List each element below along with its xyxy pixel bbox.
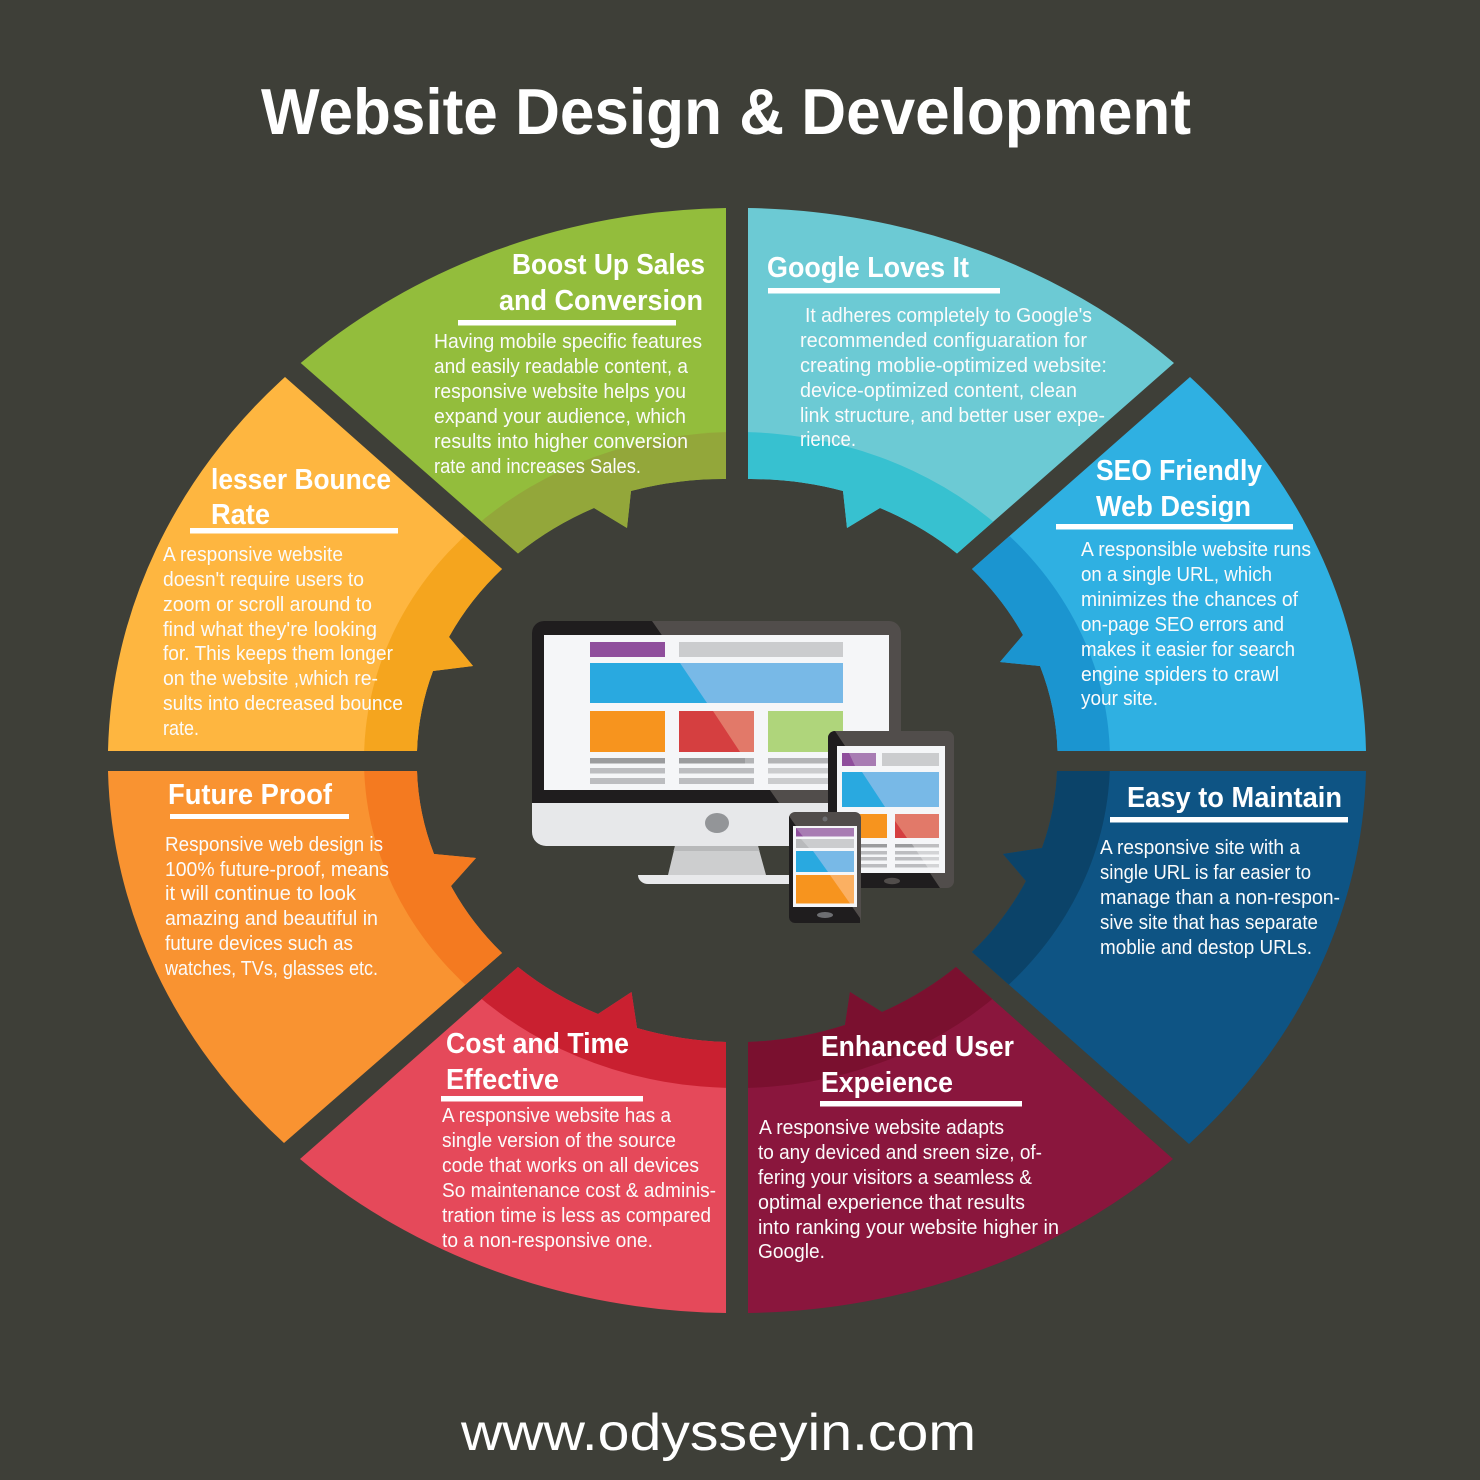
heading rule bbox=[458, 320, 676, 326]
body text: find what they're looking bbox=[163, 619, 377, 641]
body text bbox=[800, 305, 1107, 451]
body text: results into higher conversion bbox=[434, 431, 688, 453]
body text: 100% future-proof, means bbox=[165, 859, 389, 881]
body text: optimal experience that results bbox=[758, 1192, 1025, 1214]
body text: on-page SEO errors and bbox=[1081, 614, 1284, 636]
body text bbox=[758, 1117, 1059, 1263]
body text: amazing and beautiful in bbox=[165, 908, 378, 930]
icon: desktop monitor bbox=[532, 621, 901, 884]
heading rule bbox=[820, 1101, 1022, 1106]
body text: it will continue to look bbox=[165, 883, 357, 905]
heading bbox=[499, 249, 705, 317]
heading: Expeience bbox=[821, 1067, 953, 1099]
body text: It adheres completely to Google's bbox=[805, 305, 1092, 327]
body text: A responsive website has a bbox=[442, 1105, 672, 1127]
heading bbox=[821, 1031, 1014, 1099]
segment shape: blue bbox=[972, 377, 1366, 751]
body text: creating moblie-optimized website: bbox=[800, 355, 1107, 377]
body text: makes it easier for search bbox=[1081, 639, 1295, 661]
heading rule bbox=[1056, 524, 1293, 530]
heading rule bbox=[190, 528, 398, 534]
body text: A responsive site with a bbox=[1100, 837, 1301, 859]
body text: A responsible website runs bbox=[1081, 539, 1311, 561]
footer url: www.odysseyin.com bbox=[460, 1404, 976, 1462]
heading: Enhanced User bbox=[821, 1031, 1014, 1063]
body text bbox=[442, 1105, 716, 1252]
heading bbox=[211, 464, 391, 531]
body text: rience. bbox=[800, 429, 856, 451]
heading: Google Loves It bbox=[767, 252, 969, 284]
heading: Web Design bbox=[1096, 491, 1251, 523]
body text: your site. bbox=[1081, 688, 1158, 710]
body text: single URL is far easier to bbox=[1100, 862, 1311, 884]
segment shape: red bbox=[300, 967, 726, 1313]
body text: sive site that has separate bbox=[1100, 912, 1318, 934]
heading: SEO Friendly bbox=[1096, 455, 1262, 487]
heading bbox=[1096, 455, 1262, 523]
body text: moblie and destop URLs. bbox=[1100, 937, 1312, 959]
body text: expand your audience, which bbox=[434, 406, 686, 428]
icon: phone bbox=[789, 812, 861, 923]
inner darker band bbox=[482, 967, 726, 1088]
panel: seo friendly web design bbox=[972, 377, 1366, 751]
segment shape: navy bbox=[972, 771, 1366, 1144]
heading: Future Proof bbox=[168, 779, 332, 811]
panel: boost up sales and conversion bbox=[300, 208, 726, 554]
body text: A responsive website adapts bbox=[759, 1117, 1004, 1139]
panel: lesser bounce rate bbox=[108, 377, 502, 751]
body text: doesn't require users to bbox=[163, 569, 364, 591]
body text: recommended configuaration for bbox=[800, 330, 1087, 352]
body text: rate. bbox=[163, 718, 199, 740]
segment shape: green bbox=[301, 208, 726, 554]
body text: tration time is less as compared bbox=[442, 1205, 711, 1227]
body text: rate and increases Sales. bbox=[434, 456, 641, 478]
body text: sults into decreased bounce bbox=[163, 693, 403, 715]
body text bbox=[163, 544, 403, 740]
body text: watches, TVs, glasses etc. bbox=[164, 958, 378, 980]
panel: cost and time effective bbox=[300, 967, 726, 1313]
body text: A responsive website bbox=[163, 544, 343, 566]
body text: So maintenance cost & adminis- bbox=[442, 1180, 716, 1202]
heading rule bbox=[1110, 817, 1348, 822]
body text bbox=[434, 331, 702, 478]
segment shape: maroon bbox=[748, 967, 1173, 1313]
heading: Effective bbox=[446, 1064, 559, 1096]
icon: tablet bbox=[828, 731, 954, 888]
heading: Easy to Maintain bbox=[1127, 782, 1342, 814]
body text: to any deviced and sreen size, of- bbox=[758, 1142, 1042, 1164]
body text: for. This keeps them longer bbox=[163, 643, 393, 665]
heading: lesser Bounce bbox=[211, 464, 391, 496]
body text: responsive website helps you bbox=[434, 381, 686, 403]
body text: on a single URL, which bbox=[1081, 564, 1272, 586]
body text: minimizes the chances of bbox=[1081, 589, 1298, 611]
heading bbox=[446, 1028, 629, 1096]
segment shape: teal bbox=[748, 208, 1174, 554]
body text: engine spiders to crawl bbox=[1081, 664, 1279, 686]
body text: manage than a non-respon- bbox=[1100, 887, 1340, 909]
inner darker band bbox=[748, 967, 992, 1088]
heading: Boost Up Sales bbox=[512, 249, 705, 281]
heading: and Conversion bbox=[499, 285, 703, 317]
body text: single version of the source bbox=[442, 1130, 676, 1152]
inner darker band bbox=[364, 771, 502, 985]
body text bbox=[164, 834, 389, 980]
body text: fering your visitors a seamless & bbox=[758, 1167, 1033, 1189]
heading rule bbox=[170, 814, 349, 819]
heading: Cost and Time bbox=[446, 1028, 629, 1060]
body text: Google. bbox=[758, 1241, 825, 1263]
heading rule bbox=[768, 288, 1000, 294]
panel: easy to maintain bbox=[972, 771, 1366, 1144]
body text bbox=[1081, 539, 1311, 710]
inner darker band bbox=[972, 771, 1110, 984]
panel: future proof bbox=[108, 771, 502, 1143]
segment shape: yellow bbox=[108, 377, 502, 751]
inner darker band bbox=[364, 536, 502, 751]
body text: into ranking your website higher in bbox=[758, 1217, 1059, 1239]
inner darker band bbox=[748, 432, 994, 554]
body text: Having mobile specific features bbox=[434, 331, 702, 353]
segment shape: orange bbox=[108, 771, 502, 1143]
inner darker band bbox=[972, 536, 1110, 751]
body text: to a non-responsive one. bbox=[442, 1230, 653, 1252]
inner darker band bbox=[482, 432, 726, 554]
body text: on the website ,which re- bbox=[163, 668, 378, 690]
panel: google loves it bbox=[748, 208, 1174, 554]
panel: enhanced user experience bbox=[748, 967, 1173, 1313]
title: Website Design & Development bbox=[261, 75, 1191, 148]
body text: Responsive web design is bbox=[165, 834, 383, 856]
heading rule bbox=[441, 1096, 643, 1102]
body text bbox=[1100, 837, 1340, 959]
heading: Rate bbox=[211, 499, 270, 531]
illustration: responsive devices bbox=[532, 621, 954, 923]
body text: and easily readable content, a bbox=[434, 356, 689, 378]
body text: link structure, and better user expe- bbox=[800, 405, 1105, 427]
body text: device-optimized content, clean bbox=[800, 380, 1077, 402]
body text: future devices such as bbox=[165, 933, 353, 955]
body text: code that works on all devices bbox=[442, 1155, 699, 1177]
body text: zoom or scroll around to bbox=[163, 594, 372, 616]
